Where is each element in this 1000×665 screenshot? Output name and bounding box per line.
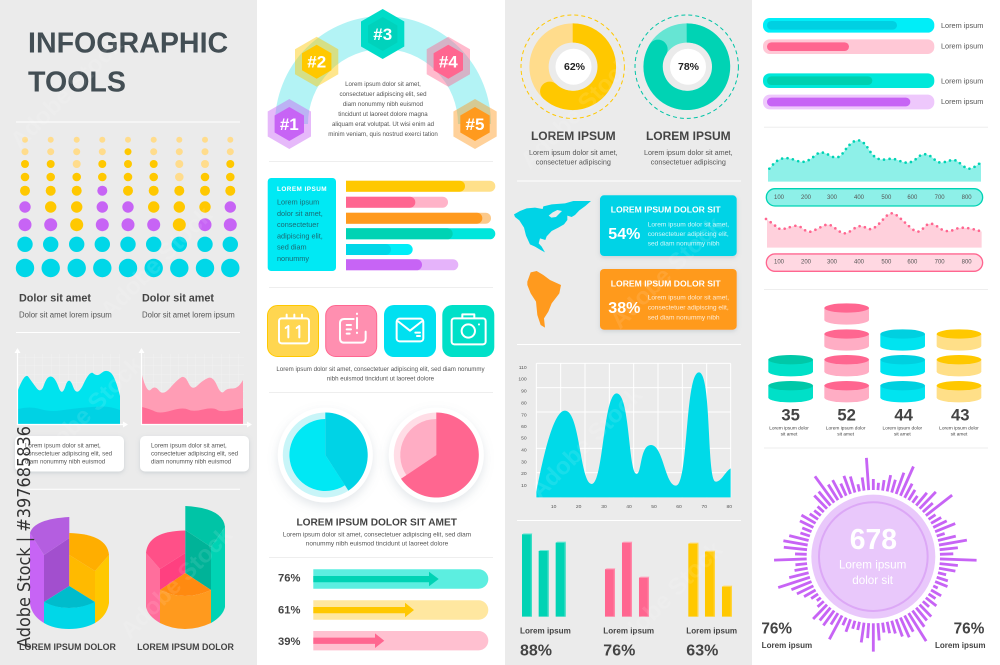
callout: left chart note: consectetuer adipiscing elit, sed [25, 450, 113, 458]
area chart: axis 10 to 110: 90 [521, 389, 527, 395]
arch text: Lorem ipsum dolor sit amet, [345, 81, 421, 88]
area chart: axis 10 to 110: 40 [626, 504, 632, 510]
radial burst chart: 678 [774, 458, 977, 652]
stacked discs: 43: sit amet [951, 431, 968, 437]
callout: right chart note: consectetuer adipiscing elit, sed [151, 450, 239, 458]
arch text: tincidunt ut laoreet dolore magna [338, 111, 428, 118]
sparkline: teal: 200 [801, 195, 812, 201]
sparkline: pink: 500 [881, 260, 892, 266]
donut captions: consectetuer adipiscing [536, 158, 611, 167]
area chart: axis 10 to 110: 50 [651, 504, 657, 510]
area chart: axis 10 to 110: 40 [521, 448, 527, 454]
3D bar chart: yellow 63%: Lorem ipsum [686, 627, 737, 636]
area chart: axis 10 to 110: 60 [676, 504, 682, 510]
donut captions: Lorem ipsum dolor sit amet, [529, 148, 618, 157]
sparkline: teal: 100 [774, 195, 785, 201]
arrow progress: 39% [278, 631, 488, 650]
callout: left chart note [15, 436, 124, 472]
area chart: axis 10 to 110: 10 [551, 504, 557, 510]
pie chart: pink [389, 408, 484, 502]
hexagon step #1 [268, 99, 311, 149]
donut captions: consectetuer adipiscing [651, 158, 726, 167]
stacked discs: 44: sit amet [894, 431, 911, 437]
arrow progress: 76%: 76% [278, 572, 300, 584]
sparkline: pink: 700 [935, 260, 945, 266]
panel: column 3 donuts, maps, area chart, bars [505, 0, 752, 665]
area chart: axis 10 to 110: 20 [521, 471, 527, 477]
area chart: axis 10 to 110: 100 [518, 377, 527, 383]
sparkline: teal: 400 [854, 195, 865, 201]
stat card: 38%: LOREM IPSUM DOLOR SIT [611, 278, 721, 288]
arrow progress: 76% [278, 569, 488, 589]
hexagon step #4 [427, 37, 470, 87]
progress bars: Lorem ipsum [941, 42, 983, 51]
donut captions [529, 129, 733, 167]
arch text [328, 81, 438, 138]
callout: right chart note [140, 436, 249, 472]
burst stat: left 76%: Lorem ipsum [762, 641, 812, 650]
hexagon step #3 [361, 9, 404, 59]
sparkline: teal [766, 140, 983, 206]
donut captions: Lorem ipsum dolor sit amet, [644, 148, 733, 157]
stacked discs: 52: 52 [837, 406, 856, 425]
stacked discs: 52 [824, 303, 869, 437]
stat card: 54%: sed diam nonummy nibh [648, 241, 720, 248]
radial burst chart: 678: 678 [850, 524, 897, 556]
donut chart: 78%: 78% [678, 61, 700, 73]
pie chart caption [283, 518, 471, 548]
donut chart: 62% [521, 15, 624, 118]
title: TOOLS [28, 67, 126, 99]
area chart: axis 10 to 110: 80 [521, 400, 527, 406]
faint stock watermark: Adobe Stock [605, 536, 728, 659]
sparkline: pink: 300 [827, 260, 838, 266]
callout: right chart note: diam nonummy nibh euismod [151, 458, 232, 466]
burst stat: left 76% [761, 621, 812, 650]
area chart: pink [138, 348, 252, 428]
pie chart caption: LOREM IPSUM DOLOR SIT AMET [296, 518, 458, 528]
dot chart captions: Dolor sit amet lorem ipsum [19, 310, 112, 320]
horizontal bar chart [346, 181, 495, 270]
cyan text card: sed diam [277, 242, 307, 252]
icons caption: Lorem ipsum dolor sit amet, consectetuer adipiscing elit, sed diam nonummy [276, 366, 486, 373]
area chart: axis 10 to 110: 10 [521, 483, 527, 489]
stacked discs: 43: Lorem ipsum dolor [939, 425, 979, 431]
3D bar chart: teal 88%: Lorem ipsum [520, 627, 571, 636]
sparkline: pink: 800 [962, 260, 972, 266]
faint stock watermark: Adobe Stock [605, 211, 728, 334]
arch text: minim veniam, quis nostrud exerci tation [328, 131, 438, 138]
burst stat: right 76%: Lorem ipsum [935, 641, 986, 650]
stat card: 54%: 54% [608, 226, 640, 243]
panel: column 2 arch, bars, icons, pies, arrows [257, 0, 505, 665]
arrow progress: 61% [278, 600, 488, 620]
callout: left chart note: Lorem ipsum dolor sit amet, [25, 442, 101, 450]
sparkline: teal: 300 [827, 195, 838, 201]
icons caption: nibh euismod tincidunt ut laoreet dolore [327, 376, 435, 382]
pie chart caption: Lorem ipsum dolor sit amet, consectetuer adipiscing elit, sed diam [283, 532, 471, 538]
vertical stock ID stamp: Adobe Stock | #397685836 [15, 426, 35, 648]
dot chart captions: Dolor sit amet [19, 293, 91, 305]
area chart: axis 10 to 110: 80 [727, 504, 732, 510]
stacked discs: 52: Lorem ipsum dolor [826, 425, 866, 431]
faint stock watermark: Adobe Stock [5, 31, 128, 154]
stacked discs: 35: 35 [781, 406, 800, 425]
icons caption [276, 366, 486, 382]
dot chart captions: Dolor sit amet [142, 293, 214, 305]
faint stock watermark: Adobe Stock [115, 521, 238, 644]
stacked discs: 43: 43 [951, 406, 970, 425]
icon: camera [442, 305, 494, 357]
3D cylinder chart: pink, teal, orange [146, 506, 225, 629]
radial burst chart: 678: dolor sit [852, 574, 894, 587]
area chart: axis 10 to 110: 60 [521, 424, 527, 430]
arrow progress: 61%: 61% [278, 604, 300, 616]
stacked discs: 44: Lorem ipsum dolor [883, 425, 923, 431]
stacked discs: 35: Lorem ipsum dolor [769, 425, 809, 431]
hexagon step #3: #3 [373, 25, 392, 44]
hexagon step #2: #2 [307, 53, 326, 72]
arch band [292, 33, 474, 124]
faint stock watermark: Adobe Stock [25, 351, 148, 474]
hexagon step #5: #5 [466, 115, 484, 134]
map: South America [527, 271, 561, 328]
hexagon step #5 [453, 99, 497, 149]
stacked discs: 43 [937, 329, 981, 437]
radial burst chart: 678: Lorem ipsum [839, 559, 906, 572]
icon: note with pencil [326, 306, 377, 356]
3D bar chart: pink 76%: Lorem ipsum [603, 627, 654, 636]
faint stock watermark: Adobe Stock [515, 51, 638, 174]
stat card: 54%: consectetuer adipiscing elit, [648, 231, 729, 238]
donut captions: LOREM IPSUM [531, 129, 616, 143]
hexagon step #4: #4 [439, 53, 458, 72]
area chart: cyan [14, 348, 128, 428]
stat card: 38%: consectetuer adipiscing elit, [648, 304, 729, 311]
arrow progress: 39%: 39% [278, 636, 300, 648]
burst stat: right 76% [935, 621, 986, 650]
cyan text card: adipiscing elit, [277, 232, 323, 240]
sparkline: teal: 500 [881, 195, 892, 201]
sparkline: pink: 400 [854, 260, 865, 266]
callout: left chart note: diam nonummy nibh euismod [25, 458, 106, 466]
map: North America [514, 201, 591, 252]
stat card: 54% [600, 195, 737, 256]
icon: mail [384, 305, 436, 357]
dot chart captions [19, 293, 235, 320]
area chart: axis 10 to 110: 70 [521, 412, 527, 418]
arch text: diam nonummy nibh euismod [343, 101, 424, 108]
area chart: axis 10 to 110 [518, 363, 732, 510]
3D bar chart: yellow 63% [686, 543, 737, 660]
faint stock watermark [5, 31, 728, 659]
cyan text card: consectetuer [277, 220, 319, 229]
sparkline: pink: 200 [801, 260, 812, 266]
3D bar chart: yellow 63%: 63% [686, 642, 718, 660]
sparkline: pink: 600 [907, 260, 918, 266]
burst stat: left 76%: 76% [761, 621, 792, 638]
stat card: 38%: 38% [608, 300, 640, 317]
arch text: aliquam erat volutpat. Ut wisi enim ad [332, 121, 435, 128]
area chart: axis 10 to 110: 50 [521, 436, 527, 442]
donut chart: 62%: 62% [564, 61, 586, 73]
progress bars: Lorem ipsum [941, 76, 983, 85]
hexagon step #2 [295, 37, 338, 87]
donut chart: 78% [635, 15, 738, 118]
cylinder chart labels: LOREM IPSUM DOLOR [137, 642, 235, 652]
3D bar chart: teal 88% [520, 533, 571, 660]
sparkline: teal: 600 [907, 195, 918, 201]
area chart: axis 10 to 110: 30 [601, 504, 607, 510]
3D cylinder chart: purple, yellow, cyan [30, 517, 109, 629]
cylinder chart labels: LOREM IPSUM DOLOR [19, 642, 117, 652]
progress bars [763, 18, 983, 109]
stat card: 54%: LOREM IPSUM DOLOR SIT [611, 204, 721, 214]
faint stock watermark: Adobe Stock [525, 381, 648, 504]
panel: column 4 progress, sparklines, stacks, radial burst [752, 0, 1000, 665]
callout: right chart note: Lorem ipsum dolor sit amet, [151, 442, 227, 450]
3D bar chart: pink 76%: 76% [603, 642, 635, 660]
arch text: consectetuer adipiscing elit, sed [339, 91, 427, 98]
stacked discs: 44: 44 [894, 406, 914, 425]
cyan text card [268, 178, 336, 271]
3D bar chart: teal 88%: 88% [520, 642, 552, 660]
panel: column 1 title, dots, area charts, 3D cylinders [0, 0, 257, 665]
cyan text card: LOREM IPSUM [277, 186, 327, 193]
title: INFOGRAPHIC [28, 28, 228, 60]
cylinder chart labels [19, 642, 235, 652]
sparkline: teal: 700 [935, 195, 945, 201]
hexagon step #1: #1 [280, 115, 299, 134]
icon: calendar [268, 306, 318, 356]
sparkline: pink: 100 [774, 260, 785, 266]
area chart: axis 10 to 110: 30 [521, 459, 527, 465]
sparkline: pink [766, 213, 983, 271]
dot matrix chart [16, 137, 239, 277]
area chart: axis 10 to 110: 70 [702, 504, 707, 510]
burst stat: right 76%: 76% [954, 621, 985, 638]
title [28, 28, 228, 99]
faint stock watermark: Adobe Stock [95, 201, 218, 324]
stat card: 38%: sed diam nonummy nibh [648, 314, 720, 321]
stat card: 38%: Lorem ipsum dolor sit amet, [648, 295, 729, 302]
cyan text card: Lorem ipsum [277, 198, 319, 206]
progress bars: Lorem ipsum [941, 97, 983, 106]
pie chart caption: nonummy nibh euismod tincidunt ut laoreet dolore [306, 540, 449, 548]
stacked discs: 44 [880, 329, 925, 437]
area chart: axis 10 to 110: 20 [576, 504, 582, 510]
donut captions: LOREM IPSUM [646, 129, 731, 143]
cyan text card: nonummy [277, 254, 309, 263]
progress bars: Lorem ipsum [941, 21, 983, 30]
pie chart: cyan [278, 408, 373, 502]
stacked discs: 52: sit amet [837, 431, 855, 437]
cyan text card: dolor sit amet, [277, 209, 323, 218]
stat card: 38% [600, 269, 737, 330]
sparkline: teal: 800 [962, 195, 972, 201]
3D bar chart: pink 76% [603, 542, 654, 660]
area chart: axis 10 to 110: 110 [519, 365, 527, 371]
stacked discs: 35 [768, 355, 813, 437]
stacked discs: 35: sit amet [781, 431, 798, 437]
stat card: 54%: Lorem ipsum dolor sit amet, [648, 221, 729, 228]
dot chart captions: Dolor sit amet lorem ipsum [142, 310, 235, 320]
